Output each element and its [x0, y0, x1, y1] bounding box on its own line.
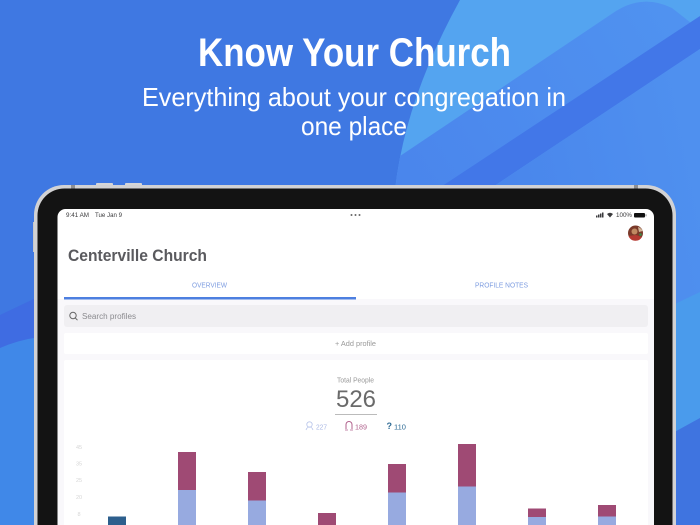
active tab underline [64, 297, 356, 300]
bar 5 [388, 464, 406, 525]
total people number: 526 [336, 386, 376, 413]
subtitle: one place [301, 111, 407, 141]
count: women [345, 422, 367, 432]
count: men: 227 [316, 424, 327, 432]
search bar [64, 305, 648, 327]
search bar: Search profiles [82, 312, 136, 321]
tab: overview: OVERVIEW [192, 282, 227, 290]
subtitle: Everything about your congregation in [142, 82, 566, 112]
y axis labels: 45 [76, 445, 82, 451]
title: Know Your Church [198, 31, 511, 75]
bar 7 [528, 508, 546, 525]
count: unknown [386, 421, 406, 432]
status bar: 9:41 AM [66, 213, 89, 219]
count: unknown: ? [386, 421, 392, 431]
status bar [66, 212, 646, 219]
bar 4 [318, 513, 336, 525]
tablet device [33, 183, 676, 525]
stats card [64, 360, 648, 525]
y axis labels: 20 [76, 495, 82, 501]
add profile card [64, 333, 648, 354]
screen [58, 209, 654, 525]
status bar: Tue Jan 9 [95, 213, 123, 219]
y axis labels: 35 [76, 462, 82, 468]
subtitle [142, 82, 566, 141]
bar 8 [598, 505, 616, 525]
avatar [628, 226, 643, 241]
bar chart [76, 444, 616, 525]
count: unknown: 110 [394, 424, 406, 432]
count: women: 189 [355, 424, 367, 432]
status bar: 100% [616, 213, 633, 219]
count: men [306, 422, 327, 432]
add profile card: + Add profile [335, 341, 376, 348]
bar 1 [108, 516, 126, 525]
bar 2 [178, 452, 196, 525]
y axis labels [76, 445, 82, 518]
y axis labels: 25 [76, 478, 82, 484]
total people label: Total People [337, 378, 374, 384]
y axis labels: 8 [77, 512, 81, 518]
tab: profile notes: PROFILE NOTES [475, 282, 528, 290]
tablet frame [34, 185, 676, 525]
tablet buttons [33, 183, 142, 252]
bar 6 [458, 444, 476, 525]
church name heading: Centerville Church [68, 247, 207, 265]
bar 3 [248, 472, 266, 525]
